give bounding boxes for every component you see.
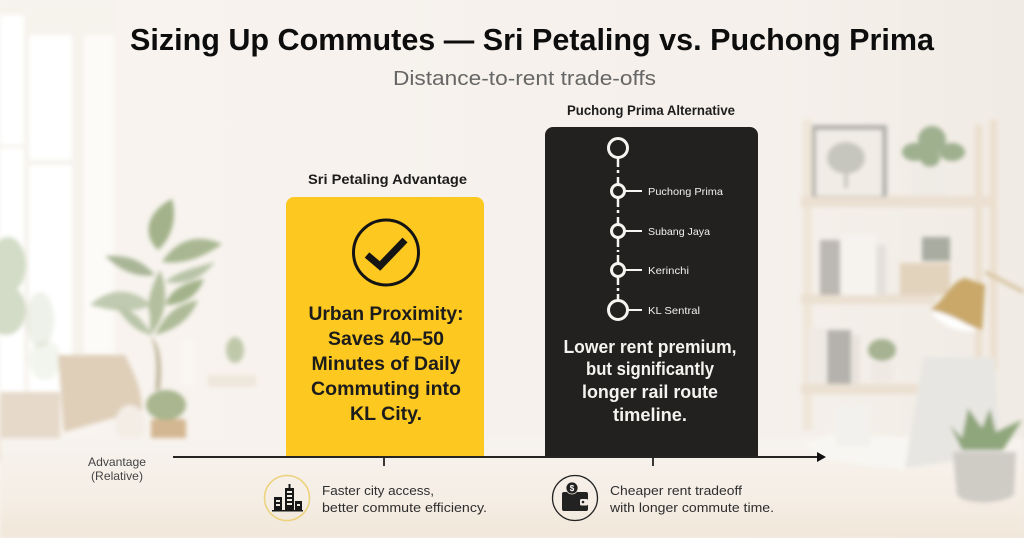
text: lower rent premium: timeline.: [613, 405, 687, 425]
panel: Sri Petaling Advantage: [286, 171, 484, 457]
station labels: [648, 186, 723, 317]
callout: cheaper rent: [552, 476, 774, 520]
station labels: Kerinchi: [648, 265, 689, 277]
axis label: [88, 455, 146, 483]
text: with longer commute time.: [609, 500, 774, 515]
icon: wallet with coin: $: [570, 484, 575, 493]
heading: Sri Petaling Advantage: Sri Petaling Advantage: [308, 171, 467, 187]
axis label: Advantage: [88, 455, 146, 469]
background: shelves: [801, 120, 997, 430]
text: urban proximity: Minutes of Daily: [312, 353, 461, 375]
yellow bar: [286, 197, 484, 457]
axis with arrow: [173, 452, 826, 466]
text: urban proximity: Commuting into: [311, 378, 461, 400]
background: window: [0, 0, 115, 398]
axis label: (Relative): [91, 469, 143, 483]
station labels: Puchong Prima: [648, 186, 723, 198]
text: Faster city access,: [322, 483, 434, 498]
icon: check mark in circle: [354, 220, 418, 285]
text: Cheaper rent tradeoff: [610, 483, 742, 498]
subtitle: Distance-to-rent trade-offs: [393, 68, 656, 90]
text: urban proximity: Urban Proximity:: [308, 303, 464, 325]
text: urban proximity: Saves 40–50: [328, 328, 444, 350]
text: urban proximity: [308, 303, 464, 425]
panel: Puchong Prima Alternative: [545, 103, 758, 457]
station labels: KL Sentral: [648, 305, 700, 317]
background: desk items: [800, 272, 1024, 502]
text: lower rent premium: Lower rent premium,: [564, 337, 736, 357]
icon: city buildings: [264, 476, 310, 520]
background: floor table: [0, 438, 1024, 538]
text: lower rent premium: but significantly: [586, 359, 714, 379]
text: urban proximity: KL City.: [350, 403, 422, 425]
text: [609, 483, 774, 515]
rail route diagram: [608, 138, 723, 320]
icon: wallet with coin: [552, 476, 598, 520]
heading: Puchong Prima Alternative: Puchong Prima Alternative: [567, 103, 735, 118]
text: better commute efficiency.: [322, 500, 487, 515]
dark bar: [545, 127, 758, 457]
title: Sizing Up Commutes — Sri Petaling vs. Puchong Prima: [130, 22, 935, 57]
callout: faster city access: [264, 476, 487, 520]
text: lower rent premium: [564, 337, 736, 425]
background: left plants and chair: [0, 199, 256, 462]
station labels: Subang Jaya: [648, 226, 710, 238]
text: lower rent premium: longer rail route: [582, 382, 718, 402]
text: [322, 483, 487, 515]
